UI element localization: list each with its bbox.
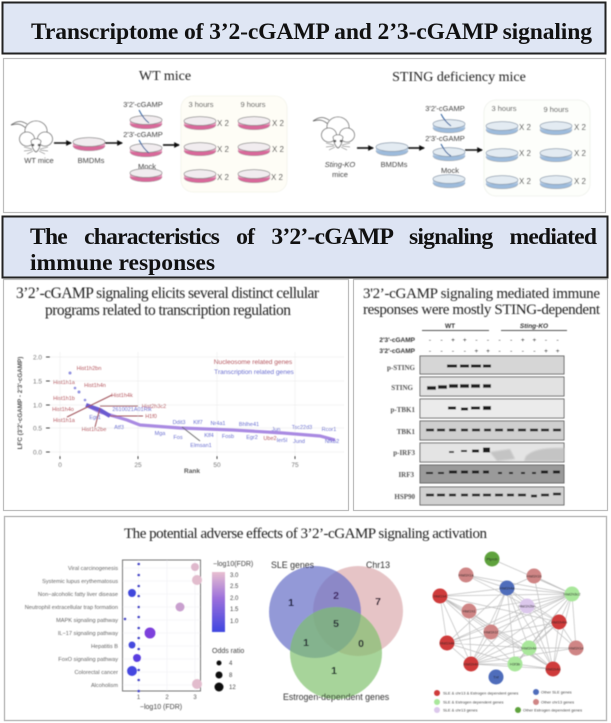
western blot title: responses were mostly STING-dependent [363, 302, 601, 318]
rank chart: Hist1h1b [53, 396, 75, 402]
WT mice workflow: X 2 [217, 145, 230, 154]
dot plot: Viral carcinogenesis [68, 566, 118, 572]
rank chart: Nucleosome related genes [214, 359, 293, 366]
STING deficiency workflow: X 2 [519, 123, 532, 132]
gene network: Hist1h4 [434, 594, 446, 598]
network legend: SLE & chr13 genes [443, 708, 477, 712]
rank plot title [16, 285, 320, 319]
blot row labels: TBK1 [397, 428, 415, 436]
blot row labels: IRF3 [398, 471, 414, 479]
WT mice workflow: BMDMs [78, 156, 105, 165]
rank chart: Hist1h4o [52, 407, 74, 413]
rank chart: 0.0 [33, 450, 42, 456]
STING deficiency workflow: mice [332, 170, 348, 179]
WT mice workflow: X 2 [271, 173, 284, 182]
western blot title: 3'2’-cGAMP signaling mediated immune [363, 286, 600, 302]
rank chart: 50 [213, 462, 221, 469]
rank chart: Hist2h3c2 [142, 404, 166, 410]
gene network: Hist1h1 [463, 610, 475, 614]
rank chart: Elmsan1 [190, 443, 212, 449]
gene network: Hist1h4e [522, 646, 536, 650]
dot plot [25, 560, 202, 711]
dot plot legend: 2.5 [230, 584, 239, 590]
gene network: Hist1h4k [440, 642, 454, 646]
dot plot: IL−17 signaling pathway [58, 631, 118, 637]
WT mice workflow: WT mice [139, 69, 191, 84]
rank chart: 1.0 [33, 402, 42, 410]
WT mice workflow: 2'3'-cGAMP [123, 130, 163, 139]
dot plot: Colorectal cancer [74, 670, 118, 676]
WT mice workflow: WT mice [24, 156, 54, 165]
blot conditions: 2'3'-cGAMP [379, 337, 416, 344]
gene network: Hist1h1b [526, 574, 542, 578]
network legend [434, 689, 582, 713]
venn diagram: Estrogen-dependent genes [283, 692, 390, 702]
venn diagram [269, 560, 403, 702]
gene network: Hist1h4n [464, 662, 478, 666]
venn diagram: 7 [375, 596, 381, 608]
WT mice workflow: X 2 [217, 119, 230, 128]
rank chart: 75 [291, 462, 299, 469]
heading: characteristics: The characteristics of 3’2’-cGAMP signaling mediated [30, 224, 597, 250]
panel: experimental design [4, 58, 606, 212]
rank chart: 2.0 [33, 354, 42, 362]
blot conditions: ----++----++ [429, 348, 560, 355]
STING deficiency workflow: X 2 [519, 149, 532, 158]
dot plot legend: 8 [229, 673, 233, 679]
network legend: Other Estrogen dependent genes [523, 708, 582, 712]
STING deficiency workflow: 3 hours [491, 104, 517, 113]
WT mice workflow: 3 hours [188, 100, 214, 109]
gene network: Hist1h2bn [518, 604, 536, 608]
STING deficiency workflow: 2'3'-cGAMP [425, 134, 465, 143]
heading: transcriptome [2, 2, 606, 54]
rank chart: Hist1h1a [53, 380, 76, 386]
network legend: Other SLE genes [541, 690, 572, 694]
rank chart: Hist1h2bn [77, 366, 101, 372]
blot row labels: STING [391, 384, 414, 392]
rank chart: H1f0 [145, 414, 157, 420]
rank chart: Rank [184, 468, 200, 475]
rank chart: Rcor1 [322, 427, 336, 433]
STING deficiency workflow: 3'2'-cGAMP [425, 104, 465, 113]
gene network: H3f3b [510, 662, 520, 666]
panel: adverse effects [4, 516, 606, 720]
venn diagram: 2 [333, 590, 339, 602]
rank chart: Mga [155, 431, 166, 437]
rank chart: Hist1h1a [53, 418, 76, 424]
dot plot: FoxO signaling pathway [58, 657, 118, 663]
blot conditions: WT [445, 323, 455, 330]
rank chart: Ddit3 [173, 420, 185, 426]
rank chart: Hist1h2be [82, 427, 106, 433]
dot plot legend: Odds ratio [212, 648, 244, 655]
gene network: Hist1h1f [484, 630, 499, 634]
gene network: Hist1h4a [500, 586, 515, 590]
dot plot: −log10 (FDR) [140, 704, 182, 711]
dot plot legend: 4 [229, 661, 233, 667]
blot conditions: --++----++-- [429, 337, 559, 344]
dot plot legend: 2.0 [230, 596, 239, 602]
rank chart: Nfkb2 [325, 439, 339, 445]
rank chart: 0.5 [33, 426, 42, 432]
venn diagram: 5 [333, 618, 339, 630]
rank plot title: programs related to transcription regulation [45, 302, 291, 319]
STING deficiency workflow: 9 hours [543, 105, 569, 114]
WT mice workflow: 9 hours [240, 100, 266, 109]
WT mice workflow: Mock [138, 162, 156, 171]
rank chart: 25 [134, 462, 142, 469]
blot row labels: p-STING [387, 364, 416, 372]
WT mice workflow: 3'2'-cGAMP [123, 100, 163, 109]
venn diagram: Chr13 [366, 560, 390, 570]
STING deficiency workflow: X 2 [519, 177, 532, 186]
dot plot: Alcoholism [91, 683, 118, 689]
rank chart: Transcription related genes [214, 369, 295, 376]
dot plot: Hepatitis B [91, 644, 118, 650]
rank chart: Ier5l [277, 438, 287, 444]
gene network: Hist1h4o [546, 668, 560, 672]
rank chart: Nr4a1 [211, 421, 225, 427]
rank chart: Klf7 [193, 420, 203, 426]
network legend: SLE & Estrogen dependent genes [443, 700, 504, 704]
rank chart: Hist1h4n [84, 383, 106, 389]
STING deficiency workflow: X 2 [574, 177, 587, 186]
rank chart: Egr2 [246, 435, 258, 441]
STING deficiency workflow: Sting-KO [325, 160, 355, 169]
rank chart: Ube2 [263, 436, 277, 442]
blot row labels: p-IRF3 [393, 449, 415, 457]
dot plot: MAPK signaling pathway [56, 618, 118, 624]
rank chart [17, 352, 344, 475]
rank plot title: 3’2’-cGAMP signaling elicits several distinct cellular [16, 285, 320, 302]
rank chart: Tsc22d3 [292, 425, 312, 431]
rank chart: Atf3 [114, 425, 124, 431]
rank chart: Jun [272, 427, 280, 433]
blot row labels: p-TBK1 [390, 406, 415, 414]
adverse effects title: The potential adverse effects of 3’2’-cGAMP signaling activation [124, 526, 488, 542]
dot plot legend: 12 [229, 685, 236, 691]
WT mice workflow: X 2 [272, 119, 285, 128]
dot plot legend [212, 561, 253, 692]
blot conditions: Sting-KO [520, 323, 548, 330]
gene network [432, 552, 584, 684]
rank chart: Hist1h4k [111, 393, 133, 399]
western blot title [363, 286, 601, 318]
network legend: SLE & chr13 & Estrogen dependent genes [443, 690, 518, 696]
dot plot: Neutrophil extracellular trap formation [25, 605, 118, 611]
dot plot: 3 [193, 695, 197, 701]
venn diagram: 0 [358, 638, 364, 650]
rank chart: 1.5 [33, 378, 42, 386]
rank chart: 0 [58, 462, 62, 469]
venn diagram: SLE genes [271, 560, 315, 570]
dot plot: Systemic lupus erythematosus [42, 579, 118, 585]
gene network: Hist1h4m [551, 620, 567, 624]
WT mice workflow: X 2 [272, 145, 285, 154]
venn diagram: 1 [303, 637, 309, 649]
STING deficiency workflow: X 2 [574, 123, 587, 132]
dot plot: 1 [137, 695, 141, 701]
blot images [420, 356, 564, 505]
rank chart: 2610021A01Rik [112, 407, 152, 413]
dot plot: Non−alcoholic fatty liver disease [38, 592, 118, 598]
dot plot legend: −log10(FDR) [213, 561, 253, 568]
gene network: Hist1h1e [568, 646, 584, 650]
blot row labels [387, 364, 416, 501]
rank chart: LFC (3'2'-cGAMP - 2'3'-cGAMP) [17, 357, 24, 449]
venn diagram: 1 [288, 597, 294, 609]
WT mice workflow [11, 69, 287, 192]
dot plot legend: 1.0 [230, 619, 239, 625]
heading: characteristics: immune responses [30, 250, 215, 276]
rank chart: Fos [173, 435, 183, 441]
WT mice workflow: X 2 [217, 173, 230, 182]
rank chart: Egr1 [89, 415, 101, 421]
dot plot legend: 1.5 [230, 607, 239, 613]
dot plot: 2 [165, 695, 169, 701]
STING deficiency workflow: Mock [441, 166, 459, 175]
blot conditions: 3'2'-cGAMP [379, 348, 416, 355]
STING deficiency workflow: STING deficiency mice [392, 70, 526, 85]
gene network: Hist1h1a [458, 574, 474, 578]
STING deficiency workflow [313, 70, 590, 196]
heading: characteristics [2, 216, 608, 278]
blot row labels: HSP90 [394, 493, 415, 501]
rank chart: Klf4 [204, 433, 214, 439]
panel: rank plot [4, 280, 348, 510]
blot conditions [379, 323, 567, 355]
gene network: Tnf [493, 676, 500, 680]
heading: transcriptome: Transcriptome of 3’2-cGAMP and 2’3-cGAMP signaling [31, 19, 592, 45]
venn diagram: 1 [331, 665, 337, 677]
STING deficiency workflow: BMDMs [381, 160, 408, 169]
rank chart: Bhlhe41 [239, 422, 259, 428]
rank chart: Fosb [222, 434, 234, 440]
gene network: Ptprcb [487, 558, 497, 562]
gene network: Hist2h3c2 [564, 592, 580, 596]
network legend: Other chr13 genes [541, 700, 574, 704]
panel: western blot [354, 280, 608, 510]
rank chart: Jund [293, 439, 305, 445]
STING deficiency workflow: X 2 [574, 149, 587, 158]
dot plot legend: 3.0 [230, 573, 239, 579]
